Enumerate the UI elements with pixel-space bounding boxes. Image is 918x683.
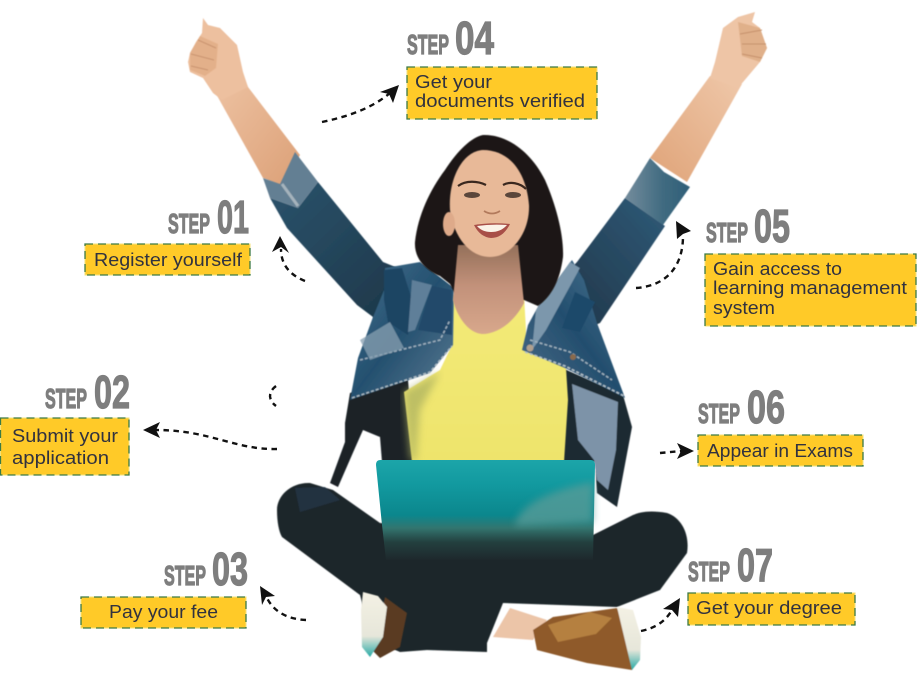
laptop highlight [515, 482, 593, 526]
heading: step 07: STEP [688, 556, 730, 587]
heading: step 01: STEP [168, 208, 210, 239]
heading: step 03: 03 [212, 543, 248, 595]
yellow t-shirt [404, 295, 568, 462]
label: gain access to learning management system: learning management [713, 278, 907, 298]
crossed legs [277, 483, 688, 652]
step 01 [85, 191, 250, 275]
face [443, 150, 529, 257]
heading: step 02: STEP [45, 383, 87, 414]
label: register yourself [85, 244, 250, 275]
heading: step 07 [688, 539, 773, 591]
arrow: step 01 [272, 236, 305, 281]
label: pay your fee: Pay your fee [109, 602, 218, 622]
left shoe [361, 592, 407, 658]
step 05 [705, 200, 916, 326]
label: pay your fee [81, 597, 246, 628]
arrow: step 06 [660, 443, 694, 459]
arrow: step 03 [260, 586, 306, 620]
step 04 [407, 12, 597, 119]
label: gain access to learning management system: Gain access to [713, 259, 842, 279]
arrow: step 04 [322, 85, 399, 122]
heading: step 07: 07 [737, 539, 773, 591]
heading: step 06 [698, 381, 785, 433]
heading: step 01 [168, 191, 249, 243]
label: get your documents verified: Get your [415, 72, 492, 92]
step 02 [0, 366, 130, 475]
label: register yourself: Register yourself [94, 250, 243, 270]
laptop [376, 460, 595, 560]
right jacket sleeve [540, 158, 690, 340]
label: submit your application [0, 418, 129, 475]
heading: step 02: 02 [94, 366, 130, 418]
heading: step 03 [164, 543, 248, 595]
left jacket panel [350, 262, 454, 400]
right arm and fist [650, 12, 767, 182]
right shoe and ankle [493, 607, 641, 670]
label: get your documents verified: documents verified [415, 91, 585, 111]
lower jacket [330, 368, 632, 507]
heading: step 03: STEP [164, 560, 206, 591]
heading: step 04 [407, 12, 494, 64]
left jacket sleeve [263, 152, 440, 345]
heading: step 05: STEP [706, 217, 748, 248]
label: get your documents verified [407, 67, 597, 119]
heading: step 04: STEP [407, 29, 449, 60]
neck [453, 245, 524, 334]
heading: step 05 [706, 200, 790, 252]
right jacket panel [522, 260, 625, 398]
left arm and fist [188, 18, 300, 186]
label: gain access to learning management system [705, 254, 916, 326]
label: appear in exams [698, 435, 863, 466]
step 06 [698, 381, 863, 466]
arrow: step 05 [636, 221, 691, 288]
hair [415, 135, 563, 306]
heading: step 05: 05 [754, 200, 790, 252]
label: appear in exams: Appear in Exams [707, 441, 853, 461]
heading: step 04: 04 [455, 12, 494, 64]
heading: step 06: STEP [698, 398, 740, 429]
stray arc mark [270, 386, 276, 406]
facial features [458, 182, 526, 238]
label: get your degree: Get your degree [696, 598, 842, 618]
heading: step 06: 06 [747, 381, 785, 433]
label: get your degree [688, 593, 855, 625]
label: submit your application: Submit your [12, 426, 118, 446]
label: submit your application: application [12, 448, 109, 468]
arrow: step 07 [641, 598, 680, 631]
shirt shadow [404, 372, 440, 460]
heading: step 02 [45, 366, 130, 418]
label: gain access to learning management system: system [713, 298, 775, 318]
arrow: step 02 [143, 422, 277, 449]
step 03 [81, 543, 248, 628]
step 07 [688, 539, 855, 625]
heading: step 01: 01 [217, 191, 249, 243]
student illustration [188, 12, 767, 670]
